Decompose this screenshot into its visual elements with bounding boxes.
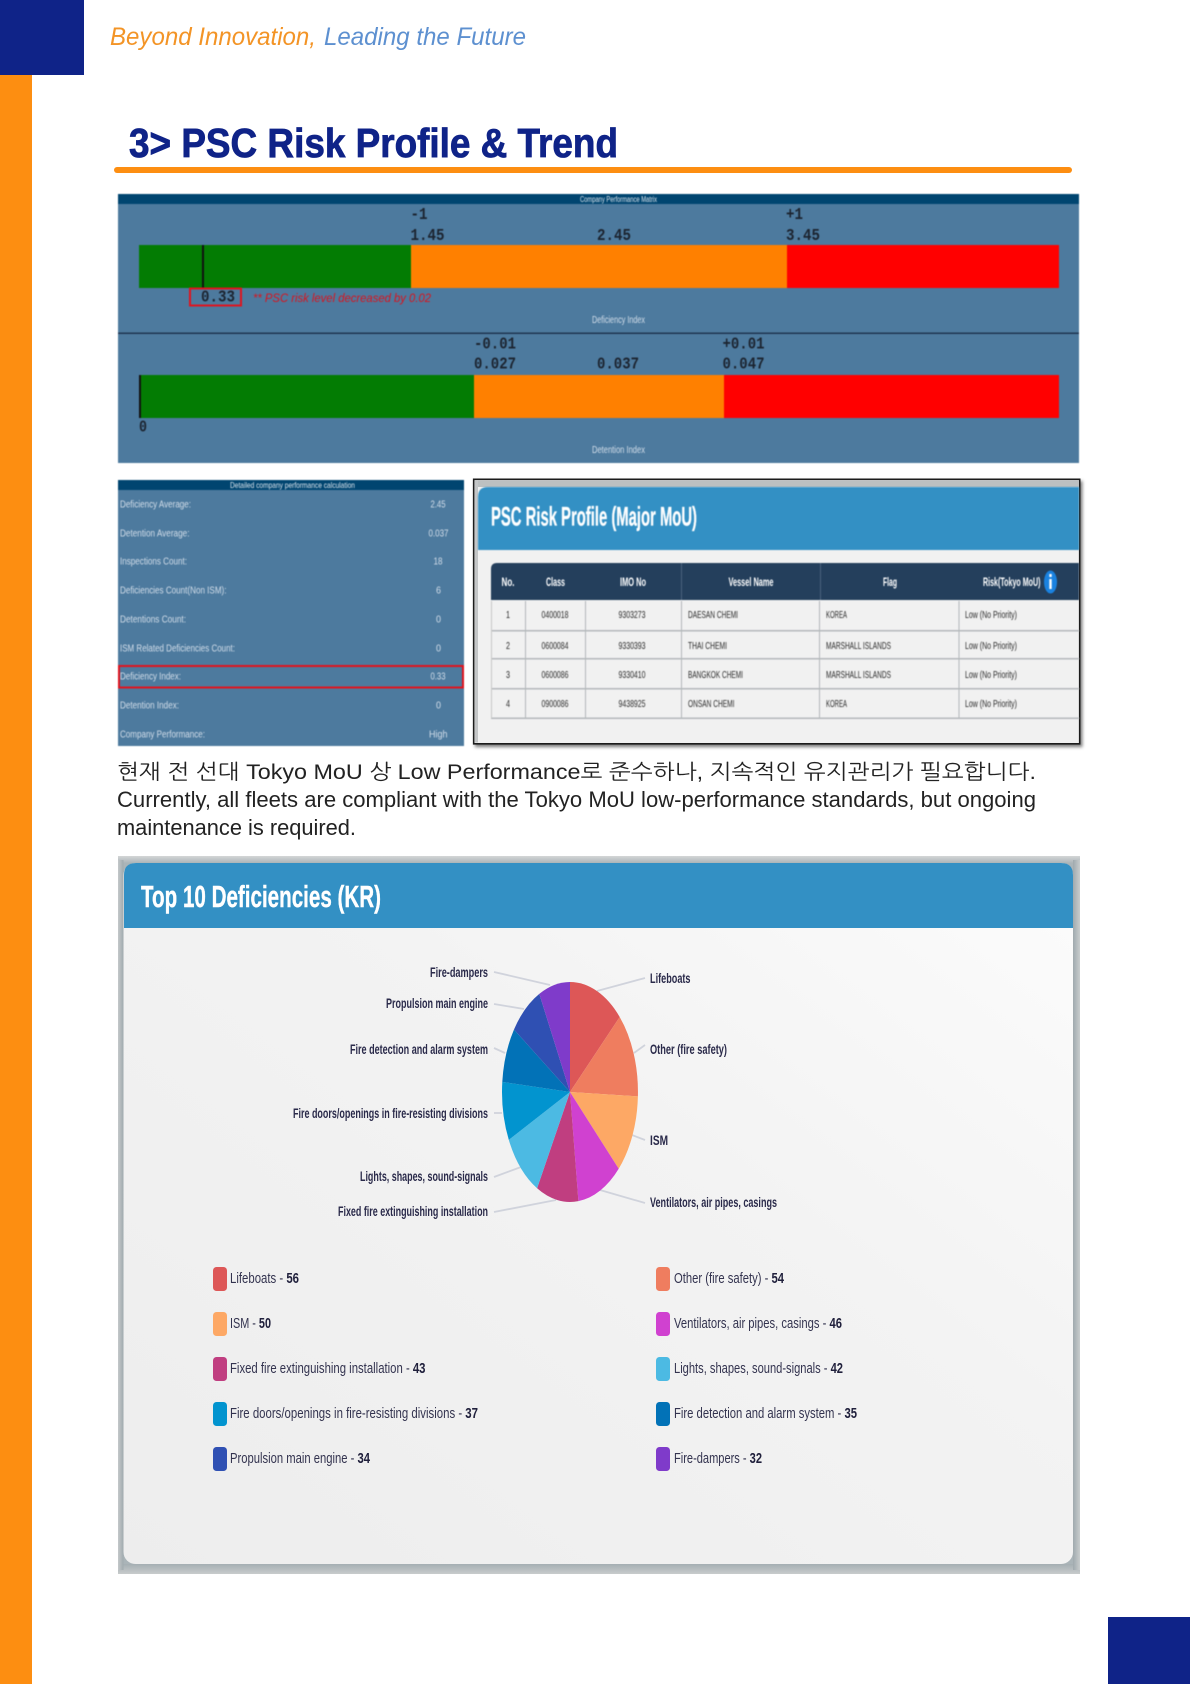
panel: detailed company performance calculation: Deficiency Index: [120, 672, 181, 682]
panel: detailed company performance calculation: 2.45 [430, 500, 446, 510]
table: 1 [506, 609, 510, 621]
tagline: Beyond Innovation, [110, 23, 316, 51]
panel: company performance matrix [118, 194, 1079, 463]
detention scale labels: 0.027 [474, 356, 516, 374]
panel: detailed company performance calculation: Company Performance: [120, 730, 205, 740]
table: Class [546, 577, 565, 589]
panel: detailed company performance calculation: 6 [436, 586, 441, 596]
card header [478, 487, 1079, 550]
legend: Propulsion main engine - 34 [230, 1450, 370, 1467]
detention scale labels: 0.037 [597, 356, 639, 374]
table: ONSAN CHEMI [688, 698, 734, 710]
red highlight box [119, 666, 463, 688]
navy corner block top-left [0, 0, 84, 75]
table: Low (No Priority) [965, 609, 1017, 621]
table: 0600086 [542, 669, 569, 681]
table: Low (No Priority) [965, 640, 1017, 652]
table: 0600084 [542, 640, 569, 652]
pie labels right: Ventilators, air pipes, casings [650, 1194, 777, 1210]
deficiency index caption: Deficiency Index [592, 315, 645, 326]
deficiency scale labels: +1 [786, 206, 803, 225]
panel: detailed company performance calculation: ISM Related Deficiencies Count: [120, 644, 235, 654]
table: MARSHALL ISLANDS [826, 640, 891, 652]
detention scale labels: 0.047 [722, 356, 764, 374]
table: Risk(Tokyo MoU) [983, 577, 1041, 589]
deficiency scale labels: 3.45 [786, 227, 820, 246]
pie labels left: Lights, shapes, sound-signals [360, 1168, 488, 1184]
table: 9303273 [618, 609, 646, 621]
deficiency scale labels: 2.45 [597, 227, 631, 246]
card header [124, 863, 1073, 928]
table: 0900086 [542, 698, 569, 710]
text block: compliance statement: Currently, all fleets are compliant with the Tokyo MoU low-performance standards, but ongoing [117, 787, 1036, 812]
deficiency scale labels [410, 206, 820, 246]
table: 9438925 [618, 698, 646, 710]
table: 3 [506, 669, 510, 681]
panel: detailed company performance calculation: Detentions Count: [120, 614, 186, 626]
panel: detailed company performance calculation: Detention Average: [120, 528, 190, 540]
pie labels right: Other (fire safety) [650, 1041, 727, 1057]
table: 2 [506, 640, 510, 652]
detention scale labels: +0.01 [722, 336, 764, 354]
table: No. [502, 577, 514, 589]
table: IMO No [620, 577, 646, 589]
text block: compliance statement: maintenance is required. [117, 815, 356, 840]
deficiency scale labels: -1 [410, 206, 428, 225]
pie labels left: Fixed fire extinguishing installation [338, 1203, 488, 1219]
detention index caption: Detention Index [592, 445, 645, 456]
pie labels left [293, 964, 488, 1219]
table: 9330410 [618, 669, 646, 681]
deficiency scale labels: 1.45 [410, 227, 444, 246]
pie labels left: Fire-dampers [430, 964, 488, 980]
table: Flag [883, 577, 897, 589]
panel: detailed company performance calculation: 0 [436, 700, 441, 712]
table: KOREA [826, 609, 847, 621]
panel: detailed company performance calculation: 0.33 [430, 672, 446, 682]
pie labels right [650, 970, 777, 1210]
panel: PSC risk profile table [474, 479, 1080, 744]
navy corner block bottom-right [1108, 1617, 1190, 1684]
panel: detailed company performance calculation: 0 [436, 614, 441, 626]
card title: Top 10 Deficiencies (KR) [141, 879, 381, 914]
detention scale labels [139, 336, 764, 438]
pie labels right: Lifeboats [650, 970, 691, 986]
text block: compliance statement [117, 761, 1036, 840]
title: 3> PSC Risk Profile & Trend [129, 120, 618, 166]
panel: detailed company performance calculation: High [429, 730, 448, 740]
table: Vessel Name [728, 577, 774, 589]
table: 9330393 [618, 640, 646, 652]
pie labels left: Fire detection and alarm system [350, 1041, 488, 1057]
table: BANGKOK CHEMI [688, 669, 743, 681]
table: MARSHALL ISLANDS [826, 669, 891, 681]
pie labels left: Propulsion main engine [386, 995, 488, 1011]
detention scale labels: 0 [139, 418, 147, 438]
tagline [110, 23, 526, 51]
legend: Fire-dampers - 32 [674, 1450, 762, 1467]
tagline: Leading the Future [324, 23, 526, 51]
legend: Fire doors/openings in fire-resisting divisions - 37 [230, 1405, 478, 1422]
panel: detailed company performance calculation: Detailed company performance calculation [230, 480, 355, 490]
table: 0400018 [542, 609, 569, 621]
table: Low (No Priority) [965, 669, 1017, 681]
legend: Other (fire safety) - 54 [674, 1270, 784, 1287]
deficiency index bar [139, 245, 1059, 288]
decorative orange side strip [0, 75, 32, 1684]
panel: detailed company performance calculation: 18 [434, 556, 443, 568]
icon: info [1044, 570, 1057, 594]
legend [213, 1267, 857, 1471]
detention index bar [139, 375, 1059, 418]
table [491, 563, 1079, 719]
legend: Fixed fire extinguishing installation - 43 [230, 1360, 426, 1377]
pie labels left: Fire doors/openings in fire-resisting divisions [293, 1105, 488, 1121]
table: THAI CHEMI [688, 640, 727, 652]
pie chart [502, 982, 638, 1202]
panel: detailed company performance calculation: Detention Index: [120, 700, 179, 712]
panel: detailed company performance calculation: Inspections Count: [120, 556, 187, 568]
detention scale labels: -0.01 [474, 336, 516, 354]
current deficiency value with red box: 0.33 [201, 288, 235, 308]
text block: compliance statement: 현재 전 선대 Tokyo MoU 상 Low Performance로 준수하나, 지속적인 유지관리가 필요합니다. [117, 761, 1036, 784]
legend: Fire detection and alarm system - 35 [674, 1405, 857, 1422]
red note: ** PSC risk level decreased by 0.02 [253, 291, 431, 305]
table: DAESAN CHEMI [688, 609, 738, 621]
panel: detailed company performance calculation: Deficiency Average: [120, 500, 191, 510]
table: 4 [506, 698, 510, 710]
pie labels right: ISM [650, 1132, 668, 1148]
legend: Lifeboats - 56 [230, 1270, 299, 1287]
legend: Lights, shapes, sound-signals - 42 [674, 1360, 843, 1377]
panel: detailed company performance calculation: 0.037 [428, 528, 449, 540]
legend: Ventilators, air pipes, casings - 46 [674, 1315, 842, 1332]
title underline [114, 167, 1072, 173]
table: Low (No Priority) [965, 698, 1017, 710]
legend: ISM - 50 [230, 1315, 271, 1332]
pie connector lines [494, 972, 645, 1212]
panel: detailed company performance calculation [118, 480, 464, 746]
table: KOREA [826, 698, 847, 710]
panel: detailed company performance calculation: 0 [436, 644, 441, 654]
card title: PSC Risk Profile (Major MoU) [491, 502, 697, 532]
panel: company performance matrix: Company Performance Matrix [580, 195, 657, 204]
panel: detailed company performance calculation: Deficiencies Count(Non ISM): [120, 586, 226, 596]
panel: top 10 deficiencies [118, 856, 1080, 1574]
